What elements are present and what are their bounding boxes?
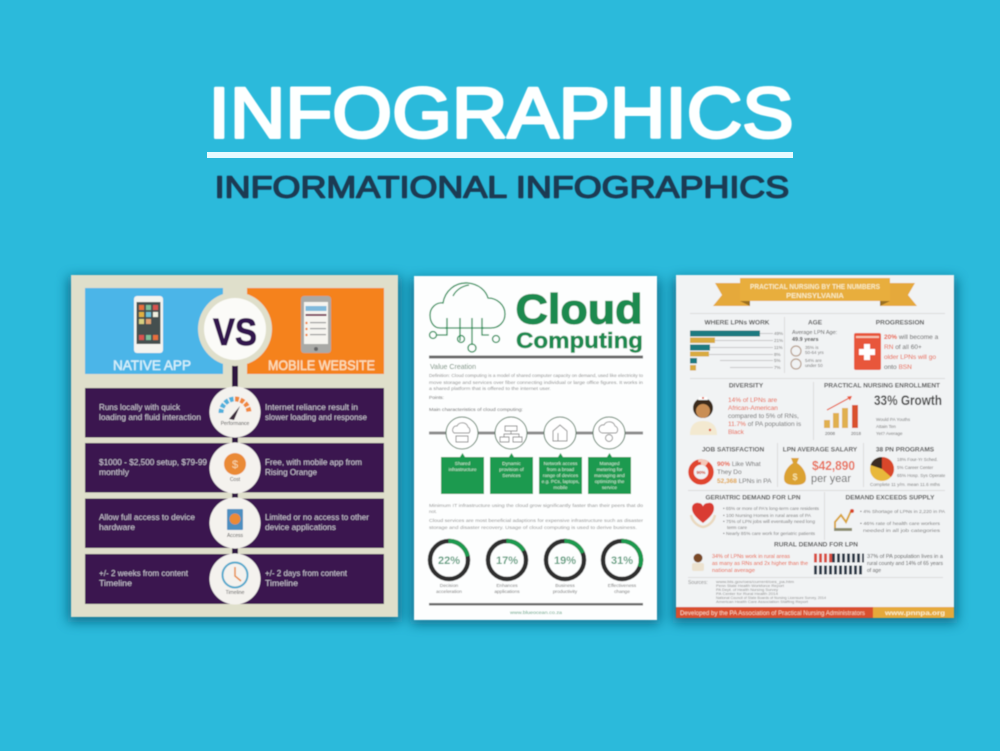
row: cost: Free, with mobile app from <box>265 457 362 467</box>
body text block <box>429 503 643 531</box>
job satisfaction text: 90% Like What <box>717 461 761 468</box>
dividers <box>688 313 945 578</box>
section headings: WHERE LPNs WORK <box>704 320 770 326</box>
demand supply text: • 46% rate of health care workers <box>860 521 941 527</box>
rural text left: national average <box>712 568 755 574</box>
bar chart: where LPNs work: 49% <box>774 331 783 336</box>
VS badge <box>198 292 272 366</box>
rule <box>429 356 643 358</box>
section headings <box>702 320 940 548</box>
green box text: metering for <box>597 467 623 473</box>
enrollment note: Would PA Youths <box>876 417 911 422</box>
icon: money bag: $ <box>792 472 798 482</box>
intro text block: move storage and services over fiber connecting individual or large office figures. It works in <box>429 380 643 386</box>
donut chart: 17%: applications <box>494 589 520 595</box>
row: performance <box>85 386 384 438</box>
section headings: GERIATRIC DEMAND FOR LPN <box>706 494 801 502</box>
row: timeline: +/- 2 weeks from content <box>99 568 189 578</box>
age text and icons <box>791 330 838 369</box>
title: INFOGRAPHICS <box>208 74 794 154</box>
section headings: DEMAND EXCEEDS SUPPLY <box>846 494 935 502</box>
pictogram: people <box>814 558 864 570</box>
progression text: 20% will become a <box>884 334 939 341</box>
age text and icons: 50-64 yrs <box>805 350 825 355</box>
donut chart: job satisfaction <box>691 462 711 482</box>
bar chart: where LPNs work: 7% <box>774 365 781 370</box>
green box text: Network access <box>544 461 578 467</box>
donut chart: 31%: change <box>614 589 630 595</box>
geriatric demand list: • 100 Nursing Homes in rural areas of PA <box>723 513 812 519</box>
icon: cloud circuit <box>430 283 505 352</box>
row: performance: Runs locally with quick <box>99 402 181 412</box>
donut chart: 22%: Decision <box>440 583 459 589</box>
icon: money bag <box>784 458 806 485</box>
sources: National Council of State Boards of Nursing Licensure Survey, 2014 <box>716 596 826 600</box>
age text and icons: under 50 <box>805 363 823 368</box>
VS badge: VS <box>213 312 257 354</box>
icon: timeline clock: Timeline <box>226 590 245 596</box>
footer bar: www.pnnpa.org <box>884 610 945 617</box>
job satisfaction text: They Do <box>717 469 742 476</box>
row: cost: monthly <box>99 467 130 477</box>
row: cost <box>85 442 384 494</box>
rural text left: as many as RNs and 2x higher than the <box>712 561 808 567</box>
geriatric demand list: term care <box>727 525 747 531</box>
bottom rule <box>429 603 643 606</box>
heading: Cloud: Cloud <box>516 286 642 332</box>
green box text: provision of <box>499 467 524 473</box>
intro text block: Main characteristics of cloud computing: <box>429 407 523 413</box>
programs text <box>870 457 946 487</box>
diversity text: compared to 5% of RNs, <box>728 413 799 420</box>
icon: performance gauge <box>210 386 260 438</box>
row: access: hardware <box>99 522 135 532</box>
bar chart: where LPNs work: 21% <box>774 338 783 343</box>
green box text: service <box>602 485 617 491</box>
green box text: Managed <box>599 461 620 467</box>
bar chart: where LPNs work <box>690 330 783 370</box>
row: access: Allow full access to device <box>99 512 195 522</box>
donut chart: 19% <box>546 541 584 595</box>
body text block: Minimum IT infrastructure using the cloud grow significantly faster than their peers that do <box>429 503 643 509</box>
icon: native app phone <box>134 296 163 353</box>
diversity text: 11.7% of PA population is <box>728 421 802 428</box>
progression text: RN of all 60+ <box>884 344 922 351</box>
panel: practical nursing <box>676 275 954 618</box>
connector <box>232 360 238 390</box>
row: cost: Rising Orange <box>265 467 317 477</box>
intro text block: a shared platform that is offered to the internet user. <box>429 386 551 392</box>
section headings: RURAL DEMAND FOR LPN <box>774 542 858 548</box>
green box text: Dynamic <box>502 461 521 467</box>
chart: enrollment growth: 2018 <box>851 431 862 436</box>
donut chart: 17% <box>488 541 526 595</box>
sources: www.bls.gov/oes/current/oes_pa.htm <box>716 580 794 584</box>
green box text: Services <box>502 473 521 479</box>
banner: PENNSYLVANIA <box>786 291 844 300</box>
row connectors <box>232 436 238 555</box>
green box text: optimizing the <box>595 479 625 485</box>
chart: enrollment growth <box>824 396 862 436</box>
icon: cost coin <box>210 442 260 494</box>
progression text: onto BSN <box>884 364 912 371</box>
heading: Computing: Computing <box>516 328 643 353</box>
age text and icons: Average LPN Age: <box>792 330 838 336</box>
section headings: JOB SATISFACTION <box>702 446 764 454</box>
rural text right: 37% of PA population lives in a <box>867 554 943 560</box>
donut chart: 17%: 17% <box>496 555 518 567</box>
section headings: LPN AVERAGE SALARY <box>783 446 858 454</box>
green box text: range of devices <box>543 473 579 479</box>
salary figure: $42,890 <box>812 458 855 473</box>
native app label: NATIVE APP <box>113 357 191 373</box>
donut chart: 22% <box>430 541 468 595</box>
row: timeline: Timeline <box>265 578 298 588</box>
section headings: PRACTICAL NURSING ENROLLMENT <box>824 382 940 390</box>
section headings: PROGRESSION <box>876 320 925 326</box>
bar chart: where LPNs work: 8% <box>774 352 781 357</box>
subtitle: INFORMATIONAL INFOGRAPHICS <box>215 170 789 204</box>
progression text <box>884 334 939 371</box>
mobile website header <box>247 288 384 374</box>
intro text block: Definition: Cloud computing is a model of shared computer capacity on demand, used like electricity to <box>429 373 643 379</box>
rural text left <box>712 554 808 574</box>
icon: cost coin: $ <box>232 459 238 471</box>
sources: Sources: <box>688 580 708 586</box>
age text and icons: 35% is <box>805 345 819 350</box>
demand supply text: needed in all job categories <box>863 528 941 534</box>
icon: demand trend <box>834 509 854 531</box>
green box text: Shared <box>455 461 471 467</box>
sources: Penn State Health Workforce Report <box>716 584 785 588</box>
icon: mobile website phone <box>301 296 331 353</box>
body text block: not. <box>429 509 437 515</box>
sources <box>688 580 826 604</box>
intro text block <box>429 364 643 413</box>
icon: timeline clock <box>210 554 260 604</box>
programs text: 5% Career Center <box>897 465 934 470</box>
row: access: device applications <box>265 522 336 532</box>
bar chart: where LPNs work: 5% <box>774 358 781 363</box>
demand supply text: • 4% Shortage of LPNs in 2,220 in PA <box>860 509 946 515</box>
body text block: Cloud services are most beneficial adaptions for expensive infrastructure such as disaster <box>429 518 643 524</box>
green box text: from a broad <box>547 467 574 473</box>
sources: American Health Care Association Staffing Report <box>716 600 809 604</box>
row: performance: slower loading and response <box>265 412 367 422</box>
intro text block: Points: <box>429 395 444 401</box>
section headings: AGE <box>808 320 823 326</box>
sources: PA Dept. of Health Nursing Survey <box>716 588 778 592</box>
panel: native app vs mobile website <box>71 275 398 617</box>
job satisfaction text: 52,368 LPNs in PA <box>717 478 772 485</box>
footer bar: Developed by the PA Association of Practical Nursing Administrators <box>680 611 865 617</box>
donut chart: 31%: 31% <box>611 555 633 567</box>
banner <box>713 278 917 306</box>
mobile website label: MOBILE WEBSITE <box>268 357 375 373</box>
row: performance: loading and fluid interaction <box>99 412 201 422</box>
age text and icons: 49.9 years <box>792 337 819 343</box>
donut chart: 22%: acceleration <box>436 589 462 595</box>
panel shadows <box>68 277 957 624</box>
panel: cloud computing <box>414 276 657 620</box>
bar chart: where LPNs work: 11% <box>774 345 783 350</box>
geriatric demand list <box>723 506 820 537</box>
icon: rural worker <box>692 554 704 571</box>
row: access <box>85 498 384 548</box>
demand supply text <box>860 509 946 534</box>
row: cost: $1000 - $2,500 setup, $79-99 <box>99 457 207 467</box>
green feature boxes <box>441 453 631 494</box>
programs text: 18% Four-Yr Sched. <box>897 457 938 462</box>
icon: medical book <box>854 333 881 370</box>
job satisfaction text <box>717 461 772 485</box>
programs text: 65% Hosp. Sys Operate <box>897 473 946 478</box>
programs text: Complete 11 y/m. mean 11.6 mths <box>870 482 941 487</box>
diversity text: 14% of LPNs are <box>728 397 778 404</box>
rural text right <box>867 554 944 574</box>
enrollment figure: 33% Growth <box>874 392 942 408</box>
rural text left: 34% of LPNs work in rural areas <box>712 554 791 560</box>
green box text <box>448 461 625 491</box>
rural text right: rural county and 14% of 65 years <box>867 561 944 567</box>
sources: PA Center for Rural Health 2014 <box>716 592 778 596</box>
row: timeline: Timeline <box>99 578 132 588</box>
timeline line <box>429 432 643 434</box>
salary period: per year <box>811 473 851 485</box>
icon: nurse <box>690 397 717 435</box>
age text and icons: 54% are <box>805 358 822 363</box>
green box text: infrastructure <box>448 467 477 473</box>
donut chart: 19%: Business <box>555 583 575 589</box>
title underline <box>207 152 793 158</box>
enrollment note <box>876 417 911 436</box>
website footer: www.blueocean.co.za <box>510 610 562 616</box>
body text block: storage and disaster recovery. Usage of cloud computing is used to derive business. <box>429 525 637 531</box>
progression text: older LPNs will go <box>884 354 936 361</box>
icon: performance gauge: Performance <box>221 421 250 427</box>
donut chart: job satisfaction: 90% <box>696 470 706 475</box>
banner: PRACTICAL NURSING BY THE NUMBERS <box>750 282 880 291</box>
geriatric demand list: • 75% of LPN jobs will eventually need long <box>723 519 815 525</box>
green box text: managing and <box>594 473 625 479</box>
donut chart: 19%: productivity <box>553 589 578 595</box>
geriatric demand list: • 65% or more of PA's long-term care residents <box>723 506 820 512</box>
native app header <box>85 288 223 374</box>
row: timeline: +/- 2 days from content <box>265 568 348 578</box>
chart: enrollment growth: 2008 <box>825 431 836 436</box>
icon: access device: Access <box>227 533 244 539</box>
green box text: mobile <box>553 485 568 491</box>
icon: access device <box>210 498 260 548</box>
row: performance: Internet reliance result in <box>265 402 358 412</box>
donut chart: 31% <box>603 541 641 595</box>
section headings: 38 PN PROGRAMS <box>876 446 935 454</box>
row: timeline <box>85 554 384 604</box>
geriatric demand list: • Nearly 85% care work for geriatric patients <box>723 531 816 537</box>
footer bar <box>676 607 954 618</box>
intro text block: Value Creation <box>430 364 476 371</box>
section headings: DIVERSITY <box>729 382 764 390</box>
diversity text: African-American <box>728 405 778 412</box>
row: access: Limited or no access to other <box>265 512 369 522</box>
icons: four service circles <box>446 417 625 449</box>
donut chart: 22%: 22% <box>438 555 460 567</box>
diversity text <box>728 397 802 436</box>
icon: heart in hands <box>691 503 715 527</box>
rural text right: of age <box>867 568 881 574</box>
enrollment note: Attain Ten <box>876 424 896 429</box>
donut chart: 31%: Effectiveness <box>608 583 637 589</box>
green box text: e.g. PCs, laptops, <box>542 479 579 485</box>
diversity text: Black <box>728 429 745 436</box>
enrollment note: Yet? Average <box>876 431 903 436</box>
icon: cost coin: Cost <box>230 477 241 483</box>
donut chart: 19%: 19% <box>554 555 576 567</box>
pie chart: PN programs <box>870 457 894 481</box>
donut chart: 17%: Enhances <box>496 583 518 589</box>
